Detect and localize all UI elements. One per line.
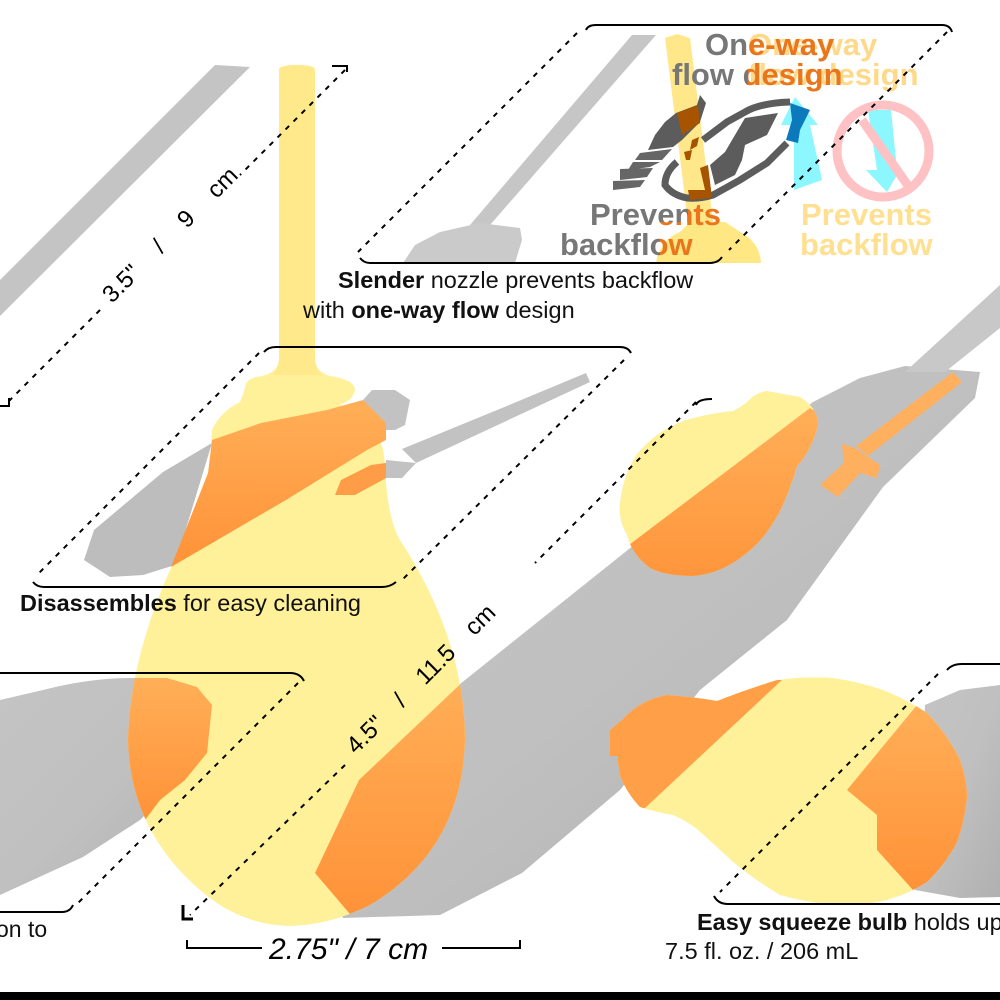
dimension rules xyxy=(187,940,520,948)
callout frame: disassembled xyxy=(33,347,631,587)
orange overlap heading: One-way xyxy=(705,27,835,62)
caption: easy squeeze bulb: 7.5 fl. oz. / 206 mL xyxy=(665,938,858,964)
caption: slender nozzle: with one-way flow design xyxy=(303,297,575,323)
dimension: nozzle length xyxy=(0,66,347,406)
yellow caption: prevents backflow: backflow xyxy=(800,227,934,262)
brown overlap on nozzle xyxy=(677,105,712,200)
blue overlap xyxy=(786,103,810,143)
callout frame: left bulb xyxy=(0,673,304,912)
bulb body xyxy=(610,677,967,905)
yellow heading: one-way flow design: flow design xyxy=(748,57,918,92)
gray shadow: disassembled nozzle xyxy=(363,373,590,478)
callout frame: one-way nozzle xyxy=(358,25,952,263)
bulb body xyxy=(128,65,465,926)
dimension end ticks xyxy=(0,66,347,406)
orange overlap caption: backflow xyxy=(560,227,694,262)
dark arrow one stripes xyxy=(613,149,672,190)
bulb body xyxy=(620,391,818,576)
dark ring xyxy=(665,102,790,198)
callout frame: lying bulb xyxy=(714,664,1000,904)
gray caption: prevents backflow: backflow xyxy=(560,227,694,262)
caption: disassembles: Disassembles for easy cleaning xyxy=(20,590,361,616)
callout frame: small bulb xyxy=(535,399,712,563)
gray shadow: upper-left nozzle xyxy=(0,65,250,316)
small yellow bulb xyxy=(620,391,818,576)
orange overlap: left xyxy=(120,678,212,820)
dimension label: 3.5" / 9 cm xyxy=(97,162,243,308)
dimension: bulb length xyxy=(183,599,501,919)
orange overlap: nozzle end xyxy=(600,680,782,808)
orange overlap: nozzle stub xyxy=(335,463,386,495)
icon: cyan up arrow xyxy=(781,97,822,190)
yellow tube xyxy=(665,34,713,222)
orange nozzle piece xyxy=(820,372,962,497)
dimension label: 4.5" / 11.5 cm xyxy=(341,599,501,759)
caption: slender nozzle: Slender nozzle prevents backflow xyxy=(338,267,693,293)
yellow caption: prevents backflow: Prevents xyxy=(801,197,932,232)
prohibition slash xyxy=(862,120,909,187)
dimension label: 2.75" / 7 cm xyxy=(268,933,428,966)
gray heading: one-way flow design: flow design xyxy=(672,57,842,92)
yellow heading: one-way flow design: One-way xyxy=(748,27,878,62)
icon: no-backflow symbol, sheared dark xyxy=(613,95,790,200)
arrow xyxy=(781,97,822,190)
gray caption: prevents backflow: Prevents xyxy=(590,197,721,232)
dark arrow two xyxy=(710,113,778,185)
dimension dashes xyxy=(190,765,345,915)
orange overlap: right xyxy=(315,684,465,914)
gray shadow: top-right nozzle xyxy=(905,285,1000,372)
orange overlap heading: flow design xyxy=(672,57,842,92)
dimension end tick xyxy=(183,905,193,919)
dimension: bulb width xyxy=(187,933,520,966)
yellow flange xyxy=(656,222,761,263)
gray shadow: disassembled bulb xyxy=(84,443,212,577)
bottom black bar xyxy=(0,992,1000,1000)
icon: prohibited down arrow xyxy=(837,105,929,197)
dimension dashes xyxy=(5,70,345,405)
orange overlap: round end xyxy=(847,706,967,890)
orange overlap: upper panel xyxy=(171,400,386,567)
orange overlap xyxy=(630,408,818,576)
orange overlap caption: Prevents xyxy=(590,197,721,232)
cyan down arrow xyxy=(866,110,897,192)
icon panel: sheared gray nozzle xyxy=(403,35,656,263)
gray tube xyxy=(470,35,656,225)
lying yellow bulb xyxy=(600,677,980,905)
prohibition ring xyxy=(837,105,929,197)
main bulb with nozzle xyxy=(120,65,480,926)
dark arrow one head xyxy=(648,95,706,150)
nozzle tube tint xyxy=(272,65,322,375)
icon panel: yellow nozzle xyxy=(656,34,761,263)
gray shadow: left bulb xyxy=(0,678,212,895)
gray heading: one-way flow design: One-way xyxy=(705,27,835,62)
gray shadow: central body band xyxy=(300,366,980,918)
gray shadow: right bulb xyxy=(915,685,1000,898)
gray flange xyxy=(403,223,522,263)
